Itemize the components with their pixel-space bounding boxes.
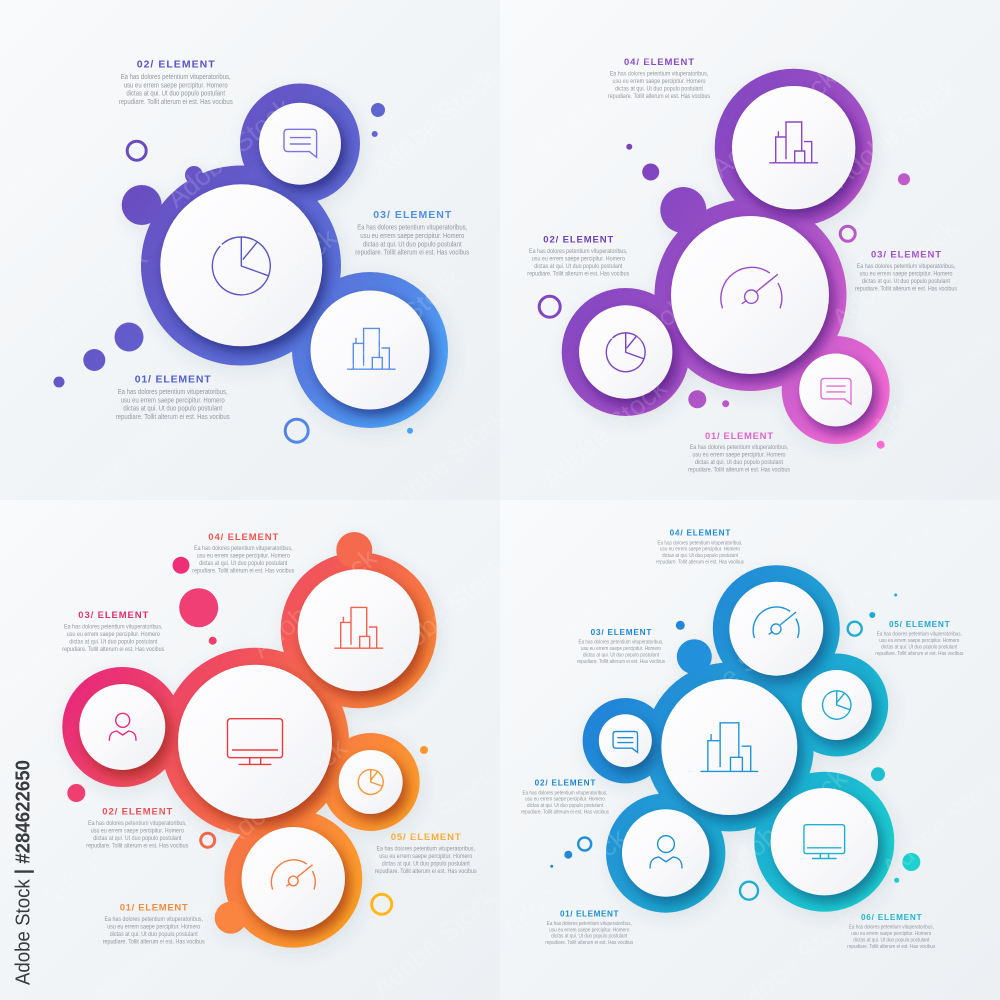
text: 05 element: usu eu errem saepe percipitur. Homero xyxy=(379,853,473,860)
text: 05 element: repudiare. Tollit alterum ei est. Has vocibus xyxy=(875,651,964,657)
text: 02 element xyxy=(119,58,233,106)
icon: pie chart xyxy=(823,691,851,719)
node: pie chart circle xyxy=(339,750,403,814)
panel: pink-orange five-circle diagram xyxy=(62,532,477,948)
text: 05 element: Ea has dolores petentium vituperatoribus, xyxy=(376,846,475,852)
text: 03 element: 03/ ELEMENT xyxy=(373,209,452,221)
text: Adobe Stock xyxy=(366,762,503,884)
node: gauge circle xyxy=(729,582,823,676)
icon: pie chart xyxy=(212,237,270,295)
text: 02 element: usu eu errem saepe percipitur. Homero xyxy=(532,255,625,262)
text: 02 element: repudiare. Tollit alterum ei est. Has vocibus xyxy=(119,99,233,106)
text: Adobe Stock xyxy=(716,762,853,884)
text: 04 element: usu eu errem saepe percipitur. Homero xyxy=(660,547,740,553)
node: city circle xyxy=(310,290,430,410)
text: Adobe Stock xyxy=(526,42,663,164)
text: 04 element: repudiare. Tollit alterum ei est. Has vocibus xyxy=(192,568,294,575)
text: Adobe Stock xyxy=(496,822,633,944)
node: monitor circle xyxy=(771,788,878,895)
text: Adobe Stock xyxy=(366,62,503,184)
icon: city buildings xyxy=(770,122,817,163)
text: 02 element: Ea has dolores petentium vituperatoribus, xyxy=(529,248,628,255)
ring shape: teal xyxy=(583,565,894,913)
text: Adobe Stock xyxy=(56,402,193,524)
text: Adobe Stock xyxy=(826,72,963,194)
text: 04 element: Ea has dolores petentium vituperatoribus, xyxy=(658,540,743,546)
text: 01 element xyxy=(688,431,790,474)
node: gauge circle xyxy=(242,827,345,930)
watermark caption: stock id: Adobe Stock | #284622650 xyxy=(12,760,34,985)
ring shape: violet xyxy=(122,84,448,428)
text: 05 element: dictas at qui. Ut duo populo postulant xyxy=(881,644,958,650)
text: 01 element: Ea has dolores petentium vituperatoribus, xyxy=(104,916,203,923)
text: 05 element xyxy=(375,832,477,875)
text: 05 element: Ea has dolores petentium vituperatoribus, xyxy=(877,632,962,638)
text: Adobe Stock xyxy=(556,522,693,644)
text: 03 element xyxy=(577,628,665,665)
text: 01 element: dictas at qui. Ut duo populo postulant xyxy=(110,931,198,938)
node: person circle xyxy=(79,684,165,770)
text: 05 element: 05/ ELEMENT xyxy=(889,620,950,629)
text: 03 element: repudiare. Tollit alterum ei est. Has vocibus xyxy=(355,250,470,257)
panel: blue-teal six-circle diagram xyxy=(521,529,964,950)
text: 01 element: dictas at qui. Ut duo populo postulant xyxy=(551,934,628,940)
text: 03 element: 03/ ELEMENT xyxy=(78,610,148,621)
text: 01 element xyxy=(103,902,205,945)
text: Adobe Stock xyxy=(161,92,298,214)
text: 01 element: 01/ ELEMENT xyxy=(135,374,211,386)
text: 01 element: 01/ ELEMENT xyxy=(120,902,188,913)
text: 02 element: dictas at qui. Ut duo populo postulant xyxy=(93,835,182,842)
text: 01 element: Ea has dolores petentium vituperatoribus, xyxy=(690,444,788,451)
node: person circle xyxy=(622,809,709,897)
text: 05 element: usu eu errem saepe percipitur. Homero xyxy=(879,638,959,644)
text: 01 element: usu eu errem saepe percipitur. Homero xyxy=(549,927,629,933)
text: 02 element: Ea has dolores petentium vituperatoribus, xyxy=(88,820,187,827)
text: 03 element: 03/ ELEMENT xyxy=(591,628,651,637)
text: 02 element: repudiare. Tollit alterum ei est. Has vocibus xyxy=(521,810,609,816)
node: main gauge circle xyxy=(671,216,829,374)
text: 03 element: usu eu errem saepe percipitur. Homero xyxy=(581,646,661,652)
text: 04 element: dictas at qui. Ut duo populo postulant xyxy=(199,560,288,567)
text: 03 element xyxy=(855,250,957,292)
icon: monitor xyxy=(228,719,282,764)
text: 03 element: repudiare. Tollit alterum ei est. Has vocibus xyxy=(855,285,957,292)
text: 02 element: dictas at qui. Ut duo populo postulant xyxy=(527,803,603,809)
text: 03 element: repudiare. Tollit alterum ei est. Has vocibus xyxy=(62,646,164,653)
text: 03 element: usu eu errem saepe percipitur. Homero xyxy=(860,270,953,277)
icon: city buildings xyxy=(348,328,395,369)
text: 02 element: dictas at qui. Ut duo populo postulant xyxy=(126,91,225,98)
text: 04 element: repudiare. Tollit alterum ei est. Has vocibus xyxy=(608,93,710,100)
text: 03 element: 03/ ELEMENT xyxy=(871,250,941,261)
text: 01 element: Ea has dolores petentium vituperatoribus, xyxy=(547,921,632,927)
text: 02 element xyxy=(521,779,609,816)
icon: pie chart xyxy=(606,333,645,372)
text: 05 element xyxy=(875,620,964,657)
text: 01 element: 01/ ELEMENT xyxy=(560,909,619,918)
text: 01 element: dictas at qui. Ut duo populo postulant xyxy=(123,406,222,413)
icon: pie chart xyxy=(358,770,383,794)
text: 03 element: dictas at qui. Ut duo populo postulant xyxy=(69,638,158,646)
text: Adobe Stock xyxy=(331,262,468,384)
text: 04 element: Ea has dolores petentium vituperatoribus, xyxy=(194,545,293,552)
text: 03 element: usu eu errem saepe percipitur. Homero xyxy=(67,631,160,638)
text: 03 element xyxy=(62,610,164,653)
icon: person xyxy=(109,713,136,740)
text: Adobe Stock xyxy=(826,212,963,334)
text: Adobe Stock xyxy=(536,372,673,494)
text: 05 element: repudiare. Tollit alterum ei est. Has vocibus xyxy=(375,868,477,875)
decorative dots: teal panel xyxy=(550,594,920,900)
icon: speech bubble xyxy=(613,732,638,752)
text: 02 element: 02/ ELEMENT xyxy=(535,779,595,788)
text: 06 element: repudiare. Tollit alterum ei est. Has vocibus xyxy=(847,944,936,950)
text: 02 element: dictas at qui. Ut duo populo postulant xyxy=(534,263,623,270)
text: 02 element: Ea has dolores petentium vituperatoribus, xyxy=(121,74,231,81)
text: 03 element: Ea has dolores petentium vituperatoribus, xyxy=(857,263,955,270)
text: 01 element: dictas at qui. Ut duo populo postulant xyxy=(695,459,783,466)
text: 06 element: 06/ ELEMENT xyxy=(861,913,922,922)
text: 04 element: 04/ ELEMENT xyxy=(208,532,278,543)
text: 01 element: repudiare. Tollit alterum ei est. Has vocibus xyxy=(545,940,634,946)
text: 02 element: usu eu errem saepe percipitur. Homero xyxy=(525,797,605,803)
text: 02 element xyxy=(86,806,188,849)
text: 04 element: usu eu errem saepe percipitur. Homero xyxy=(612,78,706,85)
text: Adobe Stock xyxy=(626,232,763,354)
icon: person xyxy=(650,836,682,868)
text: Adobe Stock xyxy=(36,792,173,914)
text: 01 element: Ea has dolores petentium vituperatoribus, xyxy=(118,389,228,396)
text: 06 element xyxy=(847,913,936,950)
text: 04 element: Ea has dolores petentium vituperatoribus, xyxy=(610,70,708,78)
text: 03 element: usu eu errem saepe percipitur. Homero xyxy=(360,233,464,240)
decorative dots: violet panel xyxy=(54,103,413,442)
icon: gauge xyxy=(753,607,799,637)
text: 01 element: usu eu errem saepe percipitur. Homero xyxy=(692,452,786,459)
text: 06 element: Ea has dolores petentium vituperatoribus, xyxy=(849,925,934,931)
text: 03 element: repudiare. Tollit alterum ei est. Has vocibus xyxy=(577,659,665,665)
node: speech bubble circle xyxy=(599,714,652,767)
node: main pie chart circle xyxy=(160,184,322,346)
ring shape: orange xyxy=(62,532,437,948)
node: city circle xyxy=(298,569,420,691)
text: 01 element: usu eu errem saepe percipitur. Homero xyxy=(107,923,201,930)
text: Adobe Stock xyxy=(376,402,513,524)
panel: blue-violet three-circle diagram xyxy=(54,58,470,442)
decorative dots: purple panel xyxy=(539,144,910,449)
icon: gauge xyxy=(721,267,782,308)
text: 02 element: usu eu errem saepe percipitur. Homero xyxy=(91,827,184,834)
icon: city buildings xyxy=(701,723,758,771)
text: 02 element: usu eu errem saepe percipitur. Homero xyxy=(124,82,228,89)
text: 01 element: 01/ ELEMENT xyxy=(705,431,773,442)
node: pie chart circle xyxy=(802,670,872,740)
icon: city buildings xyxy=(335,607,382,648)
text: 03 element: dictas at qui. Ut duo populo postulant xyxy=(862,278,950,285)
node: speech bubble circle xyxy=(799,354,872,426)
text: Adobe Stock xyxy=(16,242,153,364)
text: 01 element xyxy=(545,909,634,946)
node: city circle xyxy=(732,86,855,209)
text: 02 element: repudiare. Tollit alterum ei est. Has vocibus xyxy=(527,270,629,277)
text: 03 element: Ea has dolores petentium vituperatoribus, xyxy=(357,225,467,232)
icon: speech bubble xyxy=(821,378,851,404)
text: Adobe Stock xyxy=(666,612,803,734)
text: 03 element: dictas at qui. Ut duo populo postulant xyxy=(363,241,462,248)
panel: purple-pink four-circle diagram xyxy=(527,57,957,474)
text: Adobe Stock xyxy=(0,82,133,204)
text: Adobe Stock xyxy=(246,542,383,664)
text: 04 element xyxy=(656,529,744,566)
text: 01 element: repudiare. Tollit alterum ei est. Has vocibus xyxy=(116,414,230,421)
text: 05 element: 05/ ELEMENT xyxy=(391,832,461,843)
text: 02 element: 02/ ELEMENT xyxy=(102,806,172,817)
text: 03 element: Ea has dolores petentium vituperatoribus, xyxy=(578,640,664,646)
text: 01 element: usu eu errem saepe percipitur. Homero xyxy=(121,397,225,404)
text: Adobe Stock xyxy=(866,322,1000,444)
icon: speech bubble xyxy=(284,129,317,157)
text: 03 element: dictas at qui. Ut duo populo postulant xyxy=(583,652,659,658)
text: 02 element xyxy=(527,234,629,277)
text: 04 element: usu eu errem saepe percipitur. Homero xyxy=(197,553,290,560)
text: 02 element: repudiare. Tollit alterum ei est. Has vocibus xyxy=(86,842,188,849)
icon: monitor xyxy=(804,825,845,858)
text: Adobe Stock xyxy=(376,552,513,674)
text: 06 element: dictas at qui. Ut duo populo postulant xyxy=(853,937,930,943)
node: pie chart circle xyxy=(579,305,672,399)
text: 01 element xyxy=(116,374,230,421)
text: 01 element: repudiare. Tollit alterum ei est. Has vocibus xyxy=(688,467,790,474)
text: Adobe Stock xyxy=(206,222,343,344)
ring shape: purple xyxy=(562,69,890,444)
text: 04 element xyxy=(192,532,294,575)
icon: gauge xyxy=(271,860,315,889)
text: 02 element: Ea has dolores petentium vituperatoribus, xyxy=(522,790,608,796)
text: 03 element: Ea has dolores petentium vituperatoribus, xyxy=(64,624,163,630)
text: 04 element: dictas at qui. Ut duo populo postulant xyxy=(615,86,703,92)
text: 04 element: dictas at qui. Ut duo populo postulant xyxy=(662,553,738,559)
text: 03 element xyxy=(355,209,470,257)
text: 06 element: usu eu errem saepe percipitur. Homero xyxy=(851,931,931,937)
text: 02 element: 02/ ELEMENT xyxy=(543,235,613,246)
text: 01 element: repudiare. Tollit alterum ei est. Has vocibus xyxy=(103,938,205,945)
node: main monitor circle xyxy=(178,665,332,819)
text: 05 element: dictas at qui. Ut duo populo postulant xyxy=(382,860,470,868)
text: 04 element: 04/ ELEMENT xyxy=(670,529,730,538)
text: Adobe Stock xyxy=(216,732,353,854)
decorative dots: orange panel xyxy=(67,557,428,914)
text: Adobe Stock xyxy=(836,492,973,614)
text: Adobe Stock xyxy=(706,62,843,184)
node: speech bubble circle xyxy=(259,103,341,185)
text: 04 element xyxy=(608,57,710,100)
text: 02 element: 02/ ELEMENT xyxy=(137,58,215,70)
node: main city circle xyxy=(661,679,797,815)
text: 04 element: 04/ ELEMENT xyxy=(624,57,694,68)
text: 04 element: repudiare. Tollit alterum ei est. Has vocibus xyxy=(656,560,744,566)
